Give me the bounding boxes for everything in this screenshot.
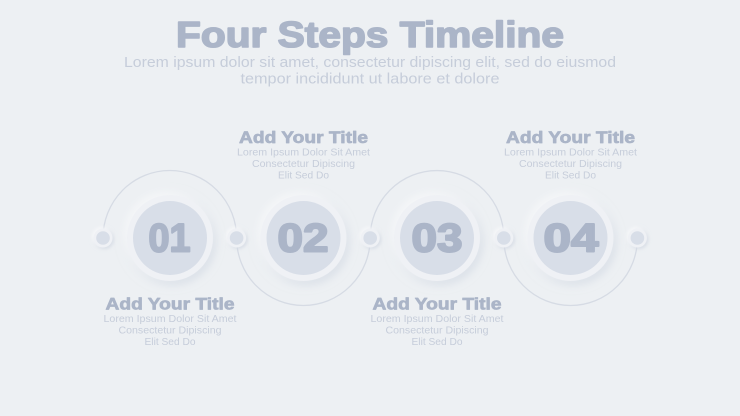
step 03 text: Consectetur Dipiscing: [386, 324, 489, 336]
step 01 circle: [127, 195, 213, 281]
step 04 text: Lorem Ipsum Dolor Sit Amet: [504, 146, 637, 158]
step 02 text: Consectetur Dipiscing: [252, 158, 355, 170]
step 03 text: [370, 296, 504, 348]
step 01 text: Add Your Title: [106, 296, 234, 314]
step 02 text: Lorem Ipsum Dolor Sit Amet: [237, 146, 370, 158]
step 03 text: Add Your Title: [372, 296, 502, 314]
timeline connector arcs: [103, 170, 637, 306]
step 01 text: [104, 296, 237, 348]
step 04 circle: [528, 195, 614, 281]
step 02 circle: 02: [278, 216, 328, 260]
timeline node dots: [94, 228, 647, 248]
step 03 circle: [394, 195, 480, 281]
step 03 circle: 03: [412, 216, 462, 260]
subtitle: tempor incididunt ut labore et dolore: [240, 72, 500, 88]
title: Four Steps Timeline: [176, 14, 564, 55]
step 01 circle: 01: [148, 216, 190, 260]
step 02 text: Add Your Title: [239, 129, 368, 147]
step 03 text: Elit Sed Do: [412, 336, 463, 348]
step 04 circle: 04: [544, 216, 599, 260]
subtitle: [124, 55, 616, 88]
subtitle: Lorem ipsum dolor sit amet, consectetur dipiscing elit, sed do eiusmod: [124, 55, 616, 71]
step 02 text: Elit Sed Do: [278, 170, 329, 182]
step 03 text: Lorem Ipsum Dolor Sit Amet: [370, 313, 504, 325]
step 02 text: [237, 129, 370, 182]
step 04 text: [504, 129, 637, 182]
step 01 text: Elit Sed Do: [144, 336, 196, 348]
step 04 text: Consectetur Dipiscing: [519, 158, 622, 170]
step 04 text: Elit Sed Do: [545, 170, 596, 182]
step 04 text: Add Your Title: [506, 129, 635, 147]
step 01 text: Lorem Ipsum Dolor Sit Amet: [104, 313, 237, 325]
step 01 text: Consectetur Dipiscing: [118, 324, 222, 336]
step 02 circle: [260, 195, 346, 281]
